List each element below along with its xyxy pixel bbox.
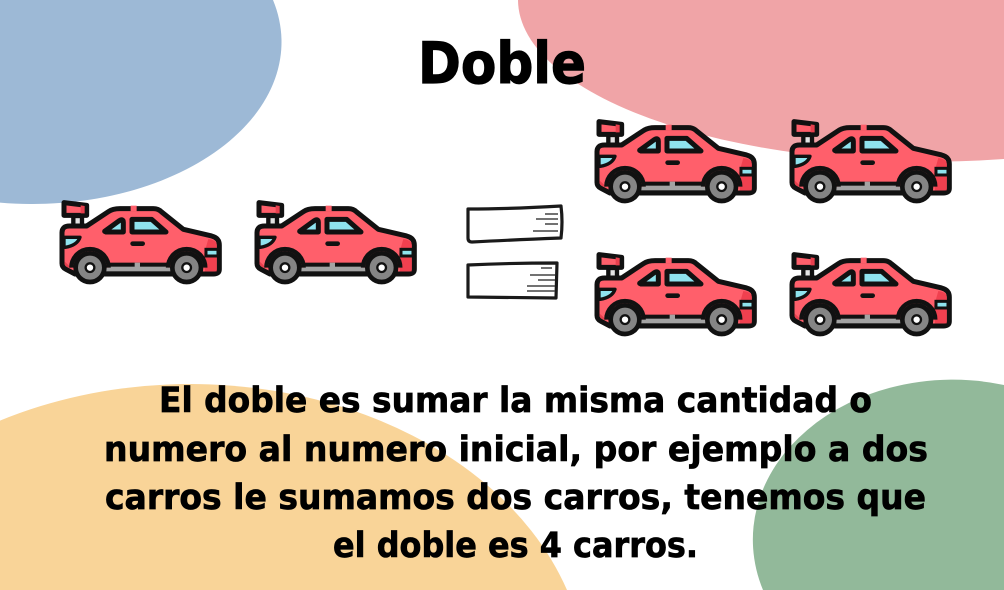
icon: result car top right: [792, 122, 949, 201]
icon: car 2 of initial pair: [257, 203, 414, 282]
icon: result car bottom left: [597, 255, 754, 334]
explanation text: El doble es sumar la misma cantidad o: [159, 381, 872, 421]
icon: car 1 of initial pair: [62, 203, 219, 282]
decorative blob: orange: [0, 384, 567, 590]
explanation text: [104, 381, 928, 566]
explanation text: carros le sumamos dos carros, tenemos que: [105, 478, 926, 518]
icon: hand-drawn equals sign: [468, 206, 562, 298]
explanation text: el doble es 4 carros.: [333, 526, 698, 566]
decorative blob: blue: [0, 0, 282, 204]
title: Doble: [418, 31, 586, 97]
icon: result car top left: [597, 122, 754, 201]
icon: result car bottom right: [792, 255, 949, 334]
decorative blob: green: [753, 380, 1004, 590]
explanation text: numero al numero inicial, por ejemplo a dos: [104, 430, 928, 470]
decorative blob: pink: [518, 0, 1004, 162]
